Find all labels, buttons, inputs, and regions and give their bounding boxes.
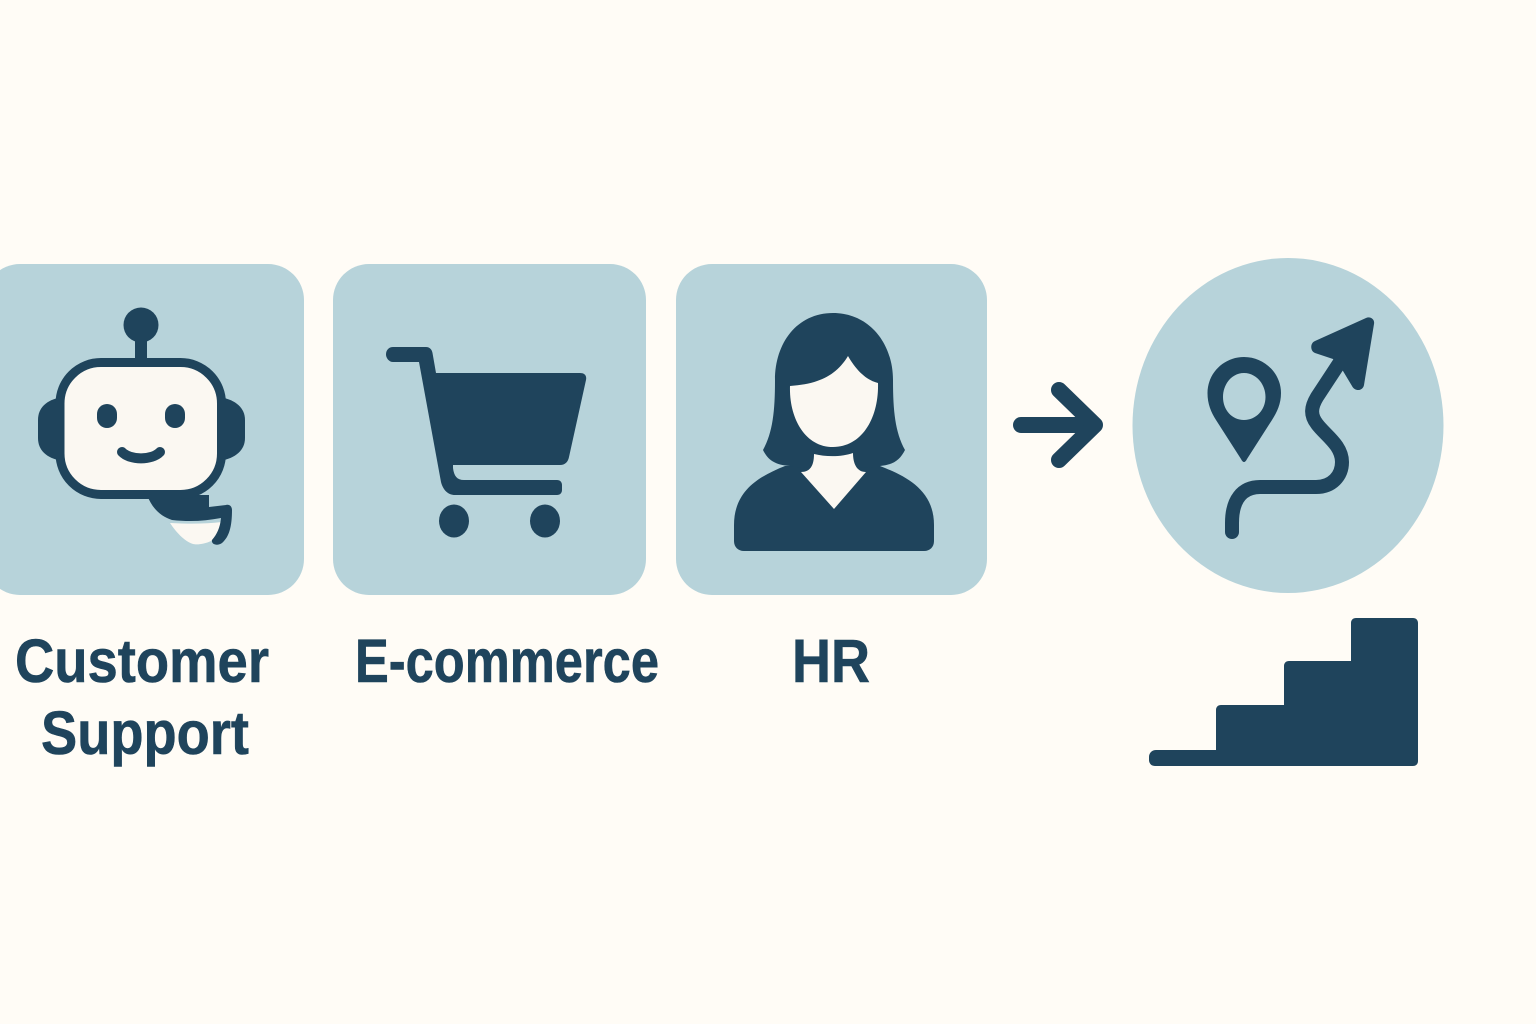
panel: journey circle	[1132, 258, 1444, 593]
label: customer support: Customer	[15, 627, 269, 695]
icon: winding path arrow	[1232, 317, 1374, 532]
icon: shopping cart	[386, 347, 586, 538]
label: customer support	[15, 627, 269, 767]
panel: HR	[676, 264, 987, 595]
arrow	[1021, 390, 1095, 460]
label: customer support: Support	[41, 699, 249, 767]
icon: location pin	[1208, 357, 1281, 462]
panel: customer support	[0, 264, 304, 595]
icon: stairs	[1149, 618, 1418, 766]
panel: e-commerce	[333, 264, 646, 595]
icon: robot	[38, 308, 245, 545]
icon: person	[734, 313, 934, 551]
label: e-commerce: E-commerce	[355, 627, 659, 695]
label: HR: HR	[792, 627, 870, 695]
